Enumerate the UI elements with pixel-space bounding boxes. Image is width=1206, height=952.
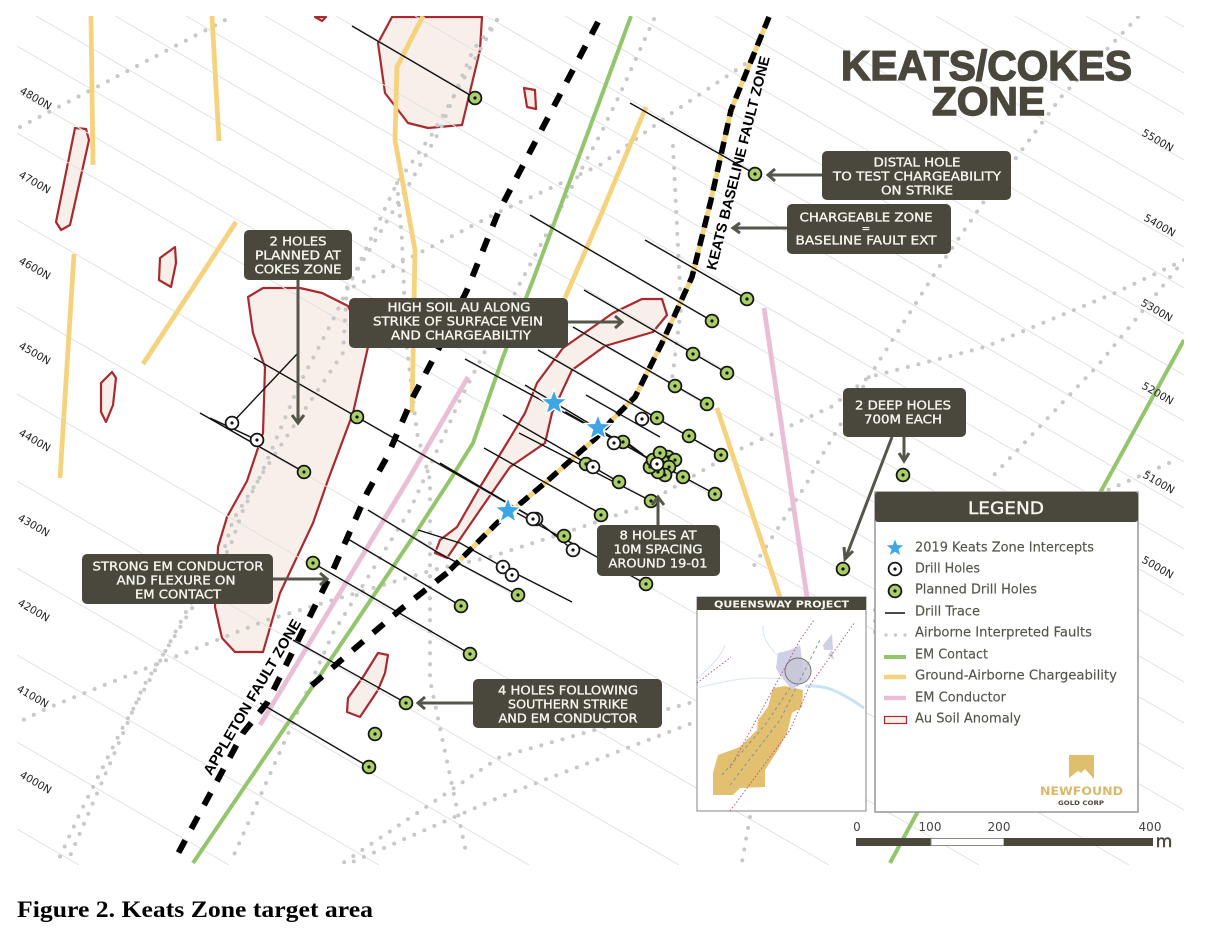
callout: strong EM conductor: EM CONTACT xyxy=(135,586,221,602)
arrow: 2 holes to Cokes zone xyxy=(292,280,304,423)
inset header xyxy=(697,597,866,610)
northing grid labels: 5000N xyxy=(1140,554,1175,582)
scale bar: 0 xyxy=(853,820,861,834)
title xyxy=(841,42,1132,124)
title: KEATS/COKES xyxy=(841,42,1132,89)
northing grid labels: 4500N xyxy=(17,340,52,368)
northing grid labels: 5200N xyxy=(1140,380,1175,408)
callout: 4 holes: 4 HOLES FOLLOWING xyxy=(498,682,638,698)
label: Appleton Fault Zone: APPLETON FAULT ZONE xyxy=(201,616,305,778)
northing grid labels: 4000N xyxy=(18,769,53,797)
northing grid labels: 5400N xyxy=(1142,212,1177,240)
legend item: intercepts: 2019 Keats Zone Intercepts xyxy=(915,540,1094,556)
arrow: 2 deep holes to upper hole xyxy=(899,437,909,461)
callout: chargeable zone xyxy=(787,204,951,254)
callout: 8 holes: 10M SPACING xyxy=(614,542,702,556)
legend panel xyxy=(875,492,1138,812)
callout: 2 deep holes: 2 DEEP HOLES xyxy=(855,398,951,412)
legend header xyxy=(875,492,1138,522)
scale bar: 100 xyxy=(919,820,941,834)
arrow: strong EM conductor xyxy=(273,573,327,585)
callout: high soil Au: AND CHARGEABILTIY xyxy=(391,328,531,342)
callout: high soil Au: STRIKE OF SURFACE VEIN xyxy=(373,314,543,328)
inset rivers xyxy=(697,625,864,708)
callout: distal hole: DISTAL HOLE xyxy=(874,154,961,170)
callout: 2 deep holes xyxy=(843,388,966,437)
arrow: 4 holes xyxy=(418,697,473,709)
callout: 2 holes planned: PLANNED AT xyxy=(255,248,341,262)
callout: 8 holes: 8 HOLES AT xyxy=(620,528,697,542)
callout: distal hole xyxy=(822,151,1011,200)
label: Keats Baseline Fault Zone: KEATS BASELINE FAULT ZONE xyxy=(704,54,774,272)
legend item: EM contact: EM Contact xyxy=(915,648,988,662)
legend header: LEGEND xyxy=(968,499,1044,519)
callout: chargeable zone: CHARGEABLE ZONE xyxy=(800,210,933,224)
callout: 4 holes xyxy=(473,679,662,728)
callout: strong EM conductor xyxy=(82,554,273,604)
inset fault lines xyxy=(697,620,855,811)
legend item: planned drill holes: Planned Drill Holes xyxy=(915,582,1037,598)
Au soil anomalies xyxy=(56,17,667,717)
inset: Queensway Project xyxy=(697,597,866,811)
callout: 4 holes: SOUTHERN STRIKE xyxy=(508,696,628,712)
callout: high soil Au xyxy=(349,298,568,348)
legend item: drill trace xyxy=(885,604,980,620)
legend item: airborne faults: Airborne Interpreted Faults xyxy=(915,626,1092,640)
Appleton fault xyxy=(173,22,598,863)
ground-airborne chargeability lines xyxy=(60,16,780,597)
logo: Newfound Gold Corp xyxy=(1040,755,1123,807)
northing grid labels: 4200N xyxy=(16,597,51,625)
arrow: chargeable zone xyxy=(733,223,787,233)
inset location circle xyxy=(785,658,811,684)
callout: 4 holes: AND EM CONDUCTOR xyxy=(498,710,638,726)
northing grid labels: 4100N xyxy=(15,683,50,711)
callout: chargeable zone: = xyxy=(862,224,870,234)
inset header: QUEENSWAY PROJECT xyxy=(714,600,850,610)
northing grid labels: 5100N xyxy=(1141,469,1176,497)
scale bar xyxy=(853,820,1172,852)
callout: 2 holes planned xyxy=(244,230,352,280)
northing grid labels: 4800N xyxy=(18,85,53,113)
callout: distal hole: ON STRIKE xyxy=(881,182,953,198)
scale bar: m xyxy=(1156,832,1172,852)
figure caption: Figure 2. Keats Zone target area xyxy=(17,897,374,922)
callout: 8 holes: AROUND 19-01 xyxy=(608,556,708,570)
northing grid labels: 4400N xyxy=(17,427,52,455)
callout: 2 deep holes: 700M EACH xyxy=(864,412,942,426)
EM contact lines xyxy=(193,16,1184,863)
callout: high soil Au: HIGH SOIL AU ALONG xyxy=(388,300,530,314)
callout: 2 holes planned: COKES ZONE xyxy=(254,262,342,276)
scale bar: 200 xyxy=(988,820,1010,834)
arrow: 8 holes xyxy=(652,497,664,525)
Keats baseline fault xyxy=(447,17,769,573)
arrow: 2 deep holes to lower hole xyxy=(844,437,892,559)
inset property claims xyxy=(713,686,803,795)
callout: strong EM conductor: AND FLEXURE ON xyxy=(116,572,236,588)
legend item: drill trace: Drill Trace xyxy=(915,604,980,620)
callout: strong EM conductor: STRONG EM CONDUCTOR xyxy=(92,558,264,574)
callout: 8 holes xyxy=(597,525,720,576)
northing grid labels: 5300N xyxy=(1139,297,1174,325)
inset purple areas xyxy=(776,634,834,690)
northing grid labels: 4600N xyxy=(17,255,52,283)
legend item: chargeability: Ground-Airborne Chargeability xyxy=(915,668,1117,684)
scale bar: 400 xyxy=(1139,820,1161,834)
legend item: Au soil anomaly: Au Soil Anomaly xyxy=(915,712,1021,726)
arrow: distal hole xyxy=(768,169,822,181)
logo: Newfound Gold Corp: GOLD CORP xyxy=(1058,799,1104,807)
northing grid labels: 4300N xyxy=(16,512,51,540)
drill traces xyxy=(200,26,755,767)
northing grid labels: 5500N xyxy=(1140,127,1175,155)
callout: 2 holes planned: 2 HOLES xyxy=(270,234,327,248)
legend item: EM contact xyxy=(884,648,988,662)
logo: Newfound Gold Corp: NEWFOUND xyxy=(1040,784,1123,798)
title: ZONE xyxy=(932,80,1045,124)
legend item: drill holes: Drill Holes xyxy=(915,562,980,576)
northing grid labels: 4700N xyxy=(17,169,52,197)
existing drill holes xyxy=(226,413,663,581)
Appleton fault eastern splay xyxy=(303,573,447,693)
arrow: high soil Au xyxy=(568,316,622,328)
EM conductor lines xyxy=(260,308,807,725)
legend item: EM conductor: EM Conductor xyxy=(915,690,1007,706)
planned drill holes xyxy=(298,92,909,773)
2019 Keats Zone intercept stars xyxy=(495,389,611,522)
callout: chargeable zone: BASELINE FAULT EXT xyxy=(796,232,937,248)
callout: distal hole: TO TEST CHARGEABILITY xyxy=(832,168,1001,184)
northing grid labels xyxy=(15,85,1177,797)
